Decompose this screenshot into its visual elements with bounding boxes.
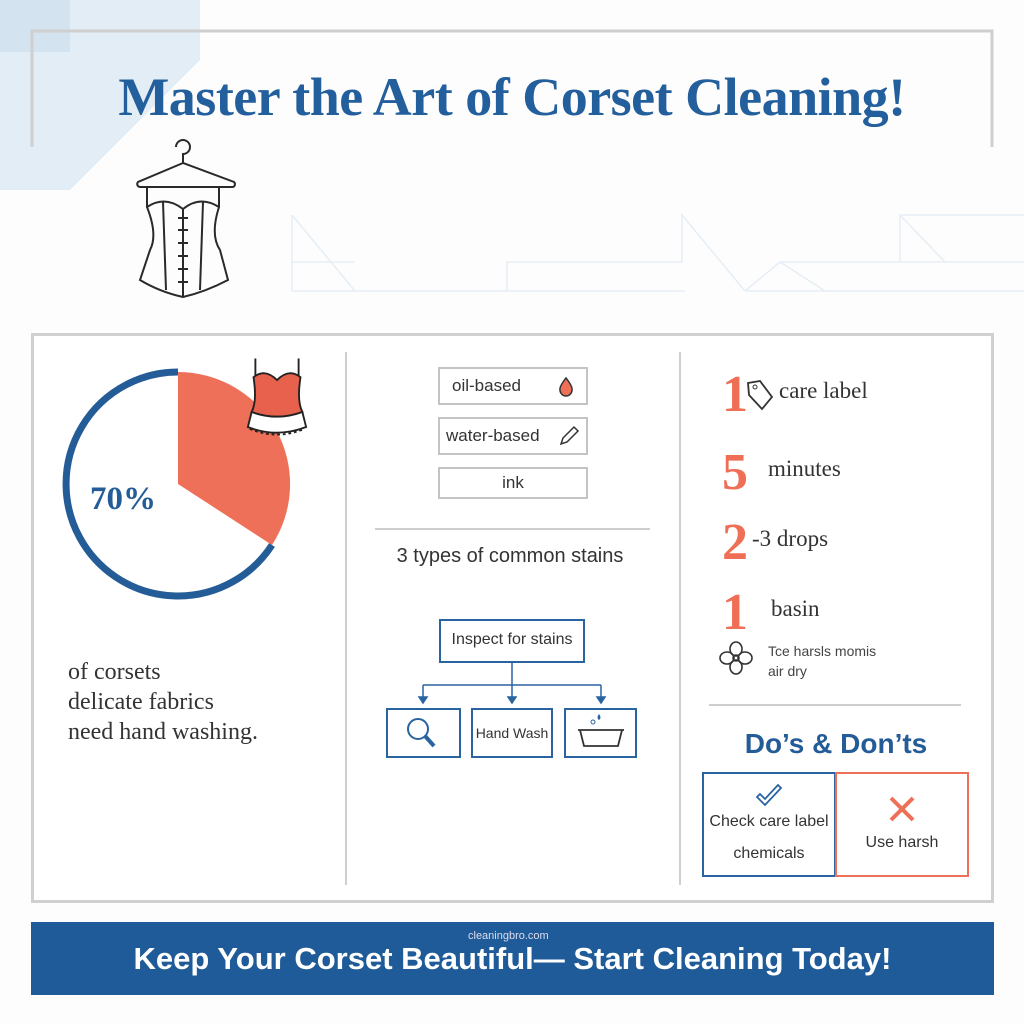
panel: numbers: minutes xyxy=(768,456,841,481)
box: do: Check care label xyxy=(709,813,829,830)
step: hand wash xyxy=(471,708,553,758)
title: Master the Art of Corset Cleaning! xyxy=(118,67,906,127)
main panel xyxy=(31,333,994,903)
footer banner: Keep Your Corset Beautiful— Start Cleaning Today! xyxy=(134,941,891,976)
box: oil-based: oil-based xyxy=(452,376,521,395)
text: air dry xyxy=(768,643,876,679)
step: search xyxy=(386,708,461,758)
panel: numbers: basin xyxy=(771,596,820,621)
icon: red corset xyxy=(246,358,308,436)
panel: numbers: -3 drops xyxy=(752,526,828,551)
box: water-based: water-based xyxy=(446,426,540,445)
box: do xyxy=(702,772,836,877)
box: ink xyxy=(438,467,588,499)
stat: 2-3 drops: 2 xyxy=(722,514,748,571)
box: don't xyxy=(835,772,969,877)
text: caption: need hand washing. xyxy=(68,719,258,745)
stat: 70%: 70% xyxy=(90,481,156,517)
footer banner xyxy=(31,922,994,995)
flowchart xyxy=(386,619,637,758)
stat: 1 basin: 1 xyxy=(722,584,748,641)
icon: fan xyxy=(719,641,753,675)
icon: corset on hanger xyxy=(136,139,236,298)
panel: numbers xyxy=(719,366,876,679)
box: oil-based xyxy=(438,367,588,405)
box: water-based xyxy=(438,417,588,455)
panel: stat pie xyxy=(62,358,308,745)
text: caption: of corsets xyxy=(68,659,161,685)
step: hand wash: Hand Wash xyxy=(476,725,548,741)
footer banner: cleaningbro.com xyxy=(468,930,549,942)
pie chart xyxy=(62,368,290,600)
box: ink: ink xyxy=(502,473,524,492)
panel: numbers: care label xyxy=(779,378,868,403)
text: caption: delicate fabrics xyxy=(68,689,214,715)
background decoration xyxy=(0,0,1024,292)
flowchart: Inspect for stains xyxy=(452,631,572,648)
heading: Do's & Don'ts: Do’s & Don’ts xyxy=(745,728,927,759)
text: caption xyxy=(68,659,258,745)
box: don't: Use harsh xyxy=(866,834,938,851)
top frame xyxy=(30,30,994,147)
text: air dry: Tce harsls momis xyxy=(768,643,876,659)
stat: 5 minutes: 5 xyxy=(722,444,748,501)
stat: 1 care label: 1 xyxy=(722,366,748,423)
box: do: chemicals xyxy=(733,845,805,862)
text: 3 types: 3 types of common stains xyxy=(397,545,623,567)
step: basin xyxy=(564,708,637,758)
text: air dry: air dry xyxy=(768,663,807,679)
panel: stain types xyxy=(375,367,650,758)
